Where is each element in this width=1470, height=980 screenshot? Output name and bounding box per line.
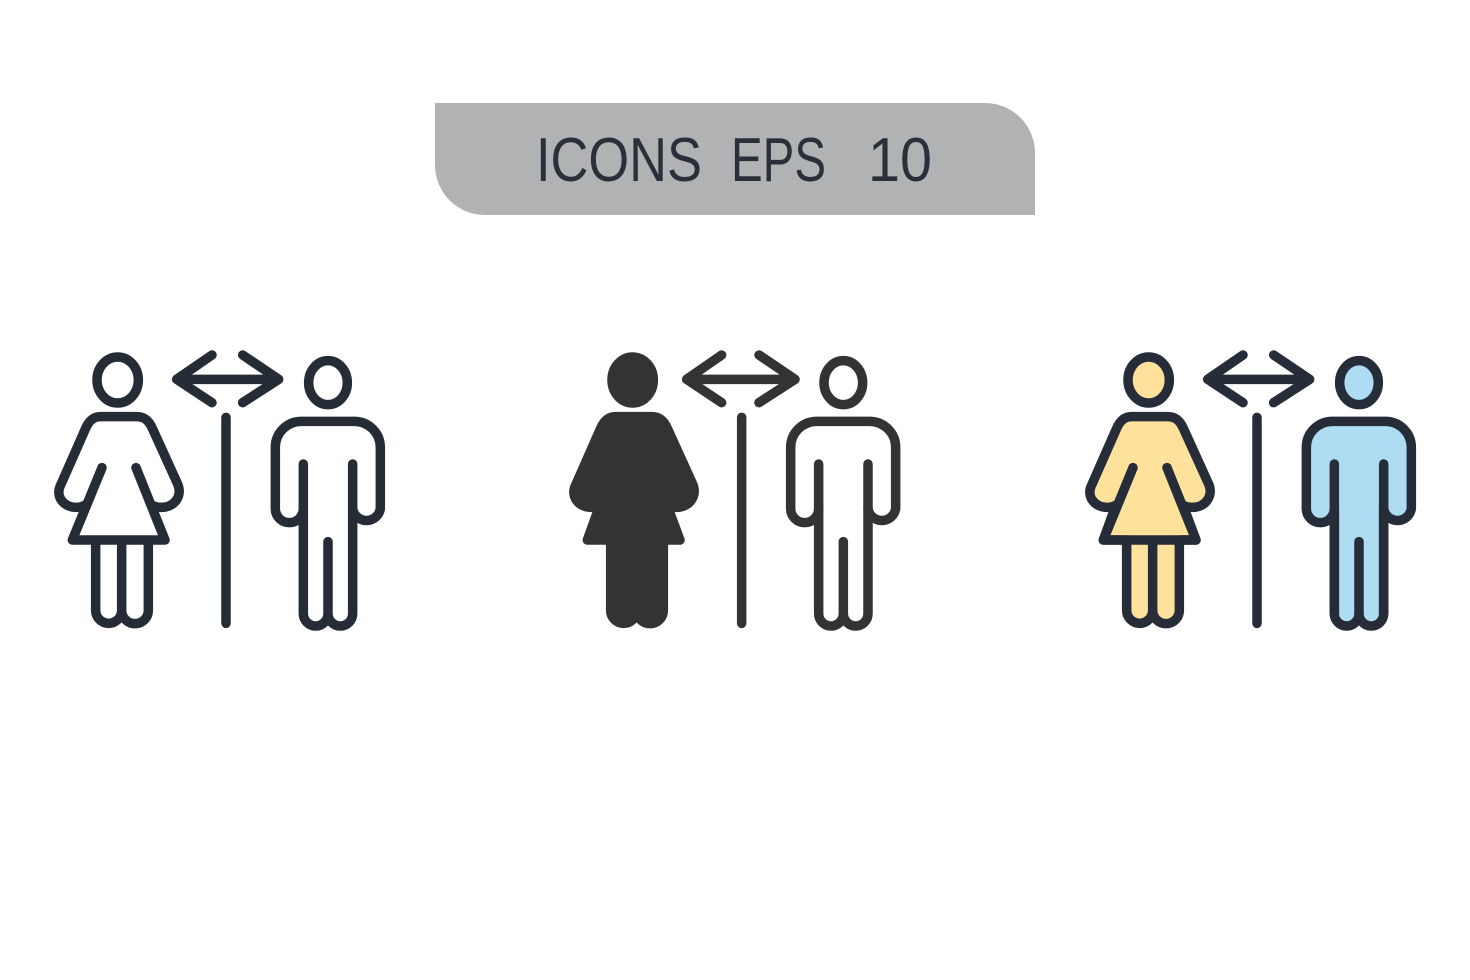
- banner title: ICONS: [536, 126, 702, 195]
- banner title: 10: [868, 126, 932, 195]
- banner background: [435, 103, 1035, 215]
- double-headed arrow: [177, 355, 279, 403]
- man figure: [275, 361, 380, 626]
- double-headed arrow: [1208, 355, 1310, 403]
- banner title: [536, 126, 932, 195]
- man figure: [791, 361, 896, 626]
- yellow woman figure: [1090, 357, 1210, 624]
- icon: solid style: [574, 355, 896, 626]
- icon: coloured style: [1090, 355, 1411, 626]
- divider line: [212, 417, 240, 623]
- banner title: EPS: [731, 126, 826, 195]
- blue man figure: [1306, 361, 1411, 626]
- divider line: [727, 417, 756, 623]
- banner: [435, 103, 1035, 215]
- double-headed arrow: [687, 355, 795, 403]
- icon: outline style: [59, 355, 380, 626]
- divider line: [1243, 417, 1271, 623]
- woman figure: [59, 357, 179, 624]
- solid woman figure: [574, 357, 694, 624]
